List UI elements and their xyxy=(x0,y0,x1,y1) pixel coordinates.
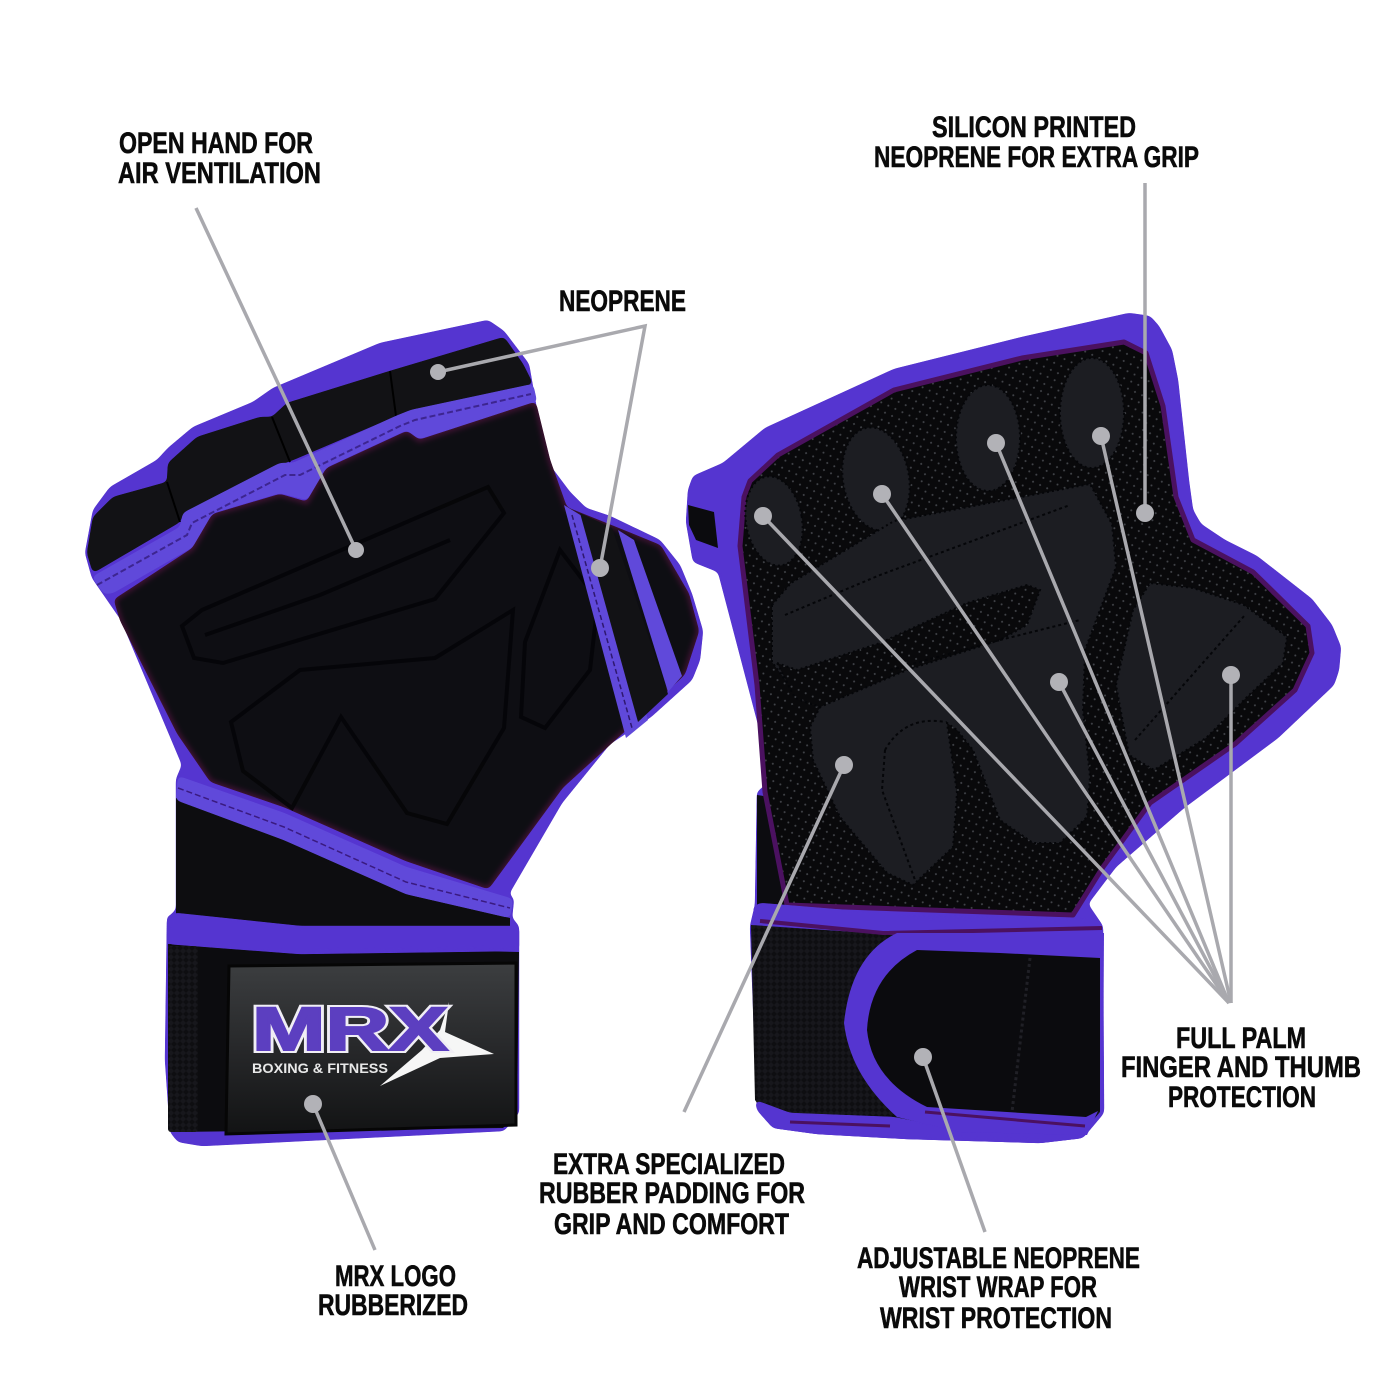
MRX logo tagline: BOXING & FITNESS xyxy=(252,1060,388,1076)
right glove finger pads xyxy=(739,358,1124,570)
left glove: back of hand xyxy=(85,320,703,1146)
right glove wrap top stitching xyxy=(760,921,1102,933)
label: full palm finger and thumb protection: PROTECTION xyxy=(1168,1081,1316,1114)
label: neoprene: NEOPRENE xyxy=(559,285,686,318)
left glove palm neoprene xyxy=(115,403,698,888)
left glove knuckle cuff xyxy=(92,384,537,594)
label: adjustable neoprene wrist wrap xyxy=(857,1242,1140,1335)
leader line: open hand for air ventilation xyxy=(196,208,364,558)
right glove hook fastener xyxy=(751,925,1100,1126)
label: silicon printed neoprene for extra grip: SILICON PRINTED xyxy=(932,111,1136,144)
left glove hook fastener xyxy=(168,946,198,1132)
leader line: adjustable neoprene wrist wrap xyxy=(914,1048,985,1232)
leader lines: full palm finger and thumb protection xyxy=(754,427,1240,1003)
left glove cuff stitching xyxy=(97,394,531,585)
label: full palm finger and thumb protection: FULL PALM xyxy=(1176,1022,1306,1055)
right glove thumb pad seam xyxy=(1135,615,1245,740)
left glove thumb straps xyxy=(564,505,682,738)
right glove silicone-printed palm xyxy=(740,342,1312,915)
MRX logo star xyxy=(380,1002,494,1086)
label: MRX logo rubberized: MRX LOGO xyxy=(335,1260,456,1293)
right glove pad seams xyxy=(785,505,1080,880)
left glove embossed palm pattern xyxy=(182,487,598,824)
right glove thumb pad xyxy=(1116,583,1287,770)
left glove wrist neoprene xyxy=(176,798,510,940)
right glove lower wrist neoprene xyxy=(757,795,790,910)
label: silicon printed neoprene for extra grip xyxy=(874,111,1199,174)
label: adjustable neoprene wrist wrap: WRIST PROTECTION xyxy=(880,1302,1112,1335)
label: MRX logo rubberized: RUBBERIZED xyxy=(318,1289,468,1322)
leader line: extra specialized rubber padding xyxy=(684,756,853,1112)
label: silicon printed neoprene for extra grip: NEOPRENE FOR EXTRA GRIP xyxy=(874,141,1199,174)
left glove wrist strap edge xyxy=(176,776,513,918)
right glove wrap top border xyxy=(753,903,1103,948)
left glove finger separations xyxy=(167,371,396,522)
right glove: palm side xyxy=(686,313,1341,1143)
right glove purple silhouette xyxy=(686,313,1341,1143)
label: full palm finger and thumb protection xyxy=(1121,1022,1361,1114)
label: open hand for air ventilation: OPEN HAND FOR xyxy=(119,127,313,160)
label: adjustable neoprene wrist wrap: ADJUSTABLE NEOPRENE xyxy=(857,1242,1140,1275)
right glove flap seam xyxy=(1012,958,1030,1112)
left glove rubber logo plate xyxy=(226,963,516,1134)
label: extra specialized rubber padding: RUBBER PADDING FOR xyxy=(539,1177,805,1210)
label: MRX logo rubberized xyxy=(318,1260,468,1322)
right glove wrap bottom border xyxy=(755,1100,1090,1143)
MRX logo wordmark: MRX xyxy=(252,995,448,1063)
leader lines: neoprene xyxy=(430,326,645,577)
label: extra specialized rubber padding: EXTRA SPECIALIZED xyxy=(553,1148,785,1181)
left glove wrist strap stitching xyxy=(178,788,510,908)
label: open hand for air ventilation: AIR VENTILATION xyxy=(118,157,321,190)
label: extra specialized rubber padding: GRIP AND COMFORT xyxy=(554,1208,789,1241)
right glove palm pad slot xyxy=(777,585,1040,707)
label: adjustable neoprene wrist wrap: WRIST WRAP FOR xyxy=(899,1271,1097,1304)
MRX logo wordmark inner fill: MRX xyxy=(252,995,448,1063)
right glove main palm pad xyxy=(772,484,1116,885)
label: open hand for air ventilation xyxy=(118,127,321,190)
leader line: MRX logo rubberized xyxy=(304,1095,375,1250)
right glove adjustable flap edge xyxy=(844,933,1104,1135)
right glove lower edge stitching xyxy=(790,1112,1085,1126)
leader line: silicon printed neoprene xyxy=(1136,183,1154,522)
left glove purple silhouette xyxy=(85,320,703,1146)
left glove wrap top border xyxy=(167,913,519,954)
label: extra specialized rubber padding xyxy=(539,1148,805,1241)
right glove adjustable flap body xyxy=(867,950,1100,1117)
left glove wrap band xyxy=(168,944,519,1132)
left glove finger padding band xyxy=(87,337,533,573)
right glove side tab xyxy=(688,505,718,548)
